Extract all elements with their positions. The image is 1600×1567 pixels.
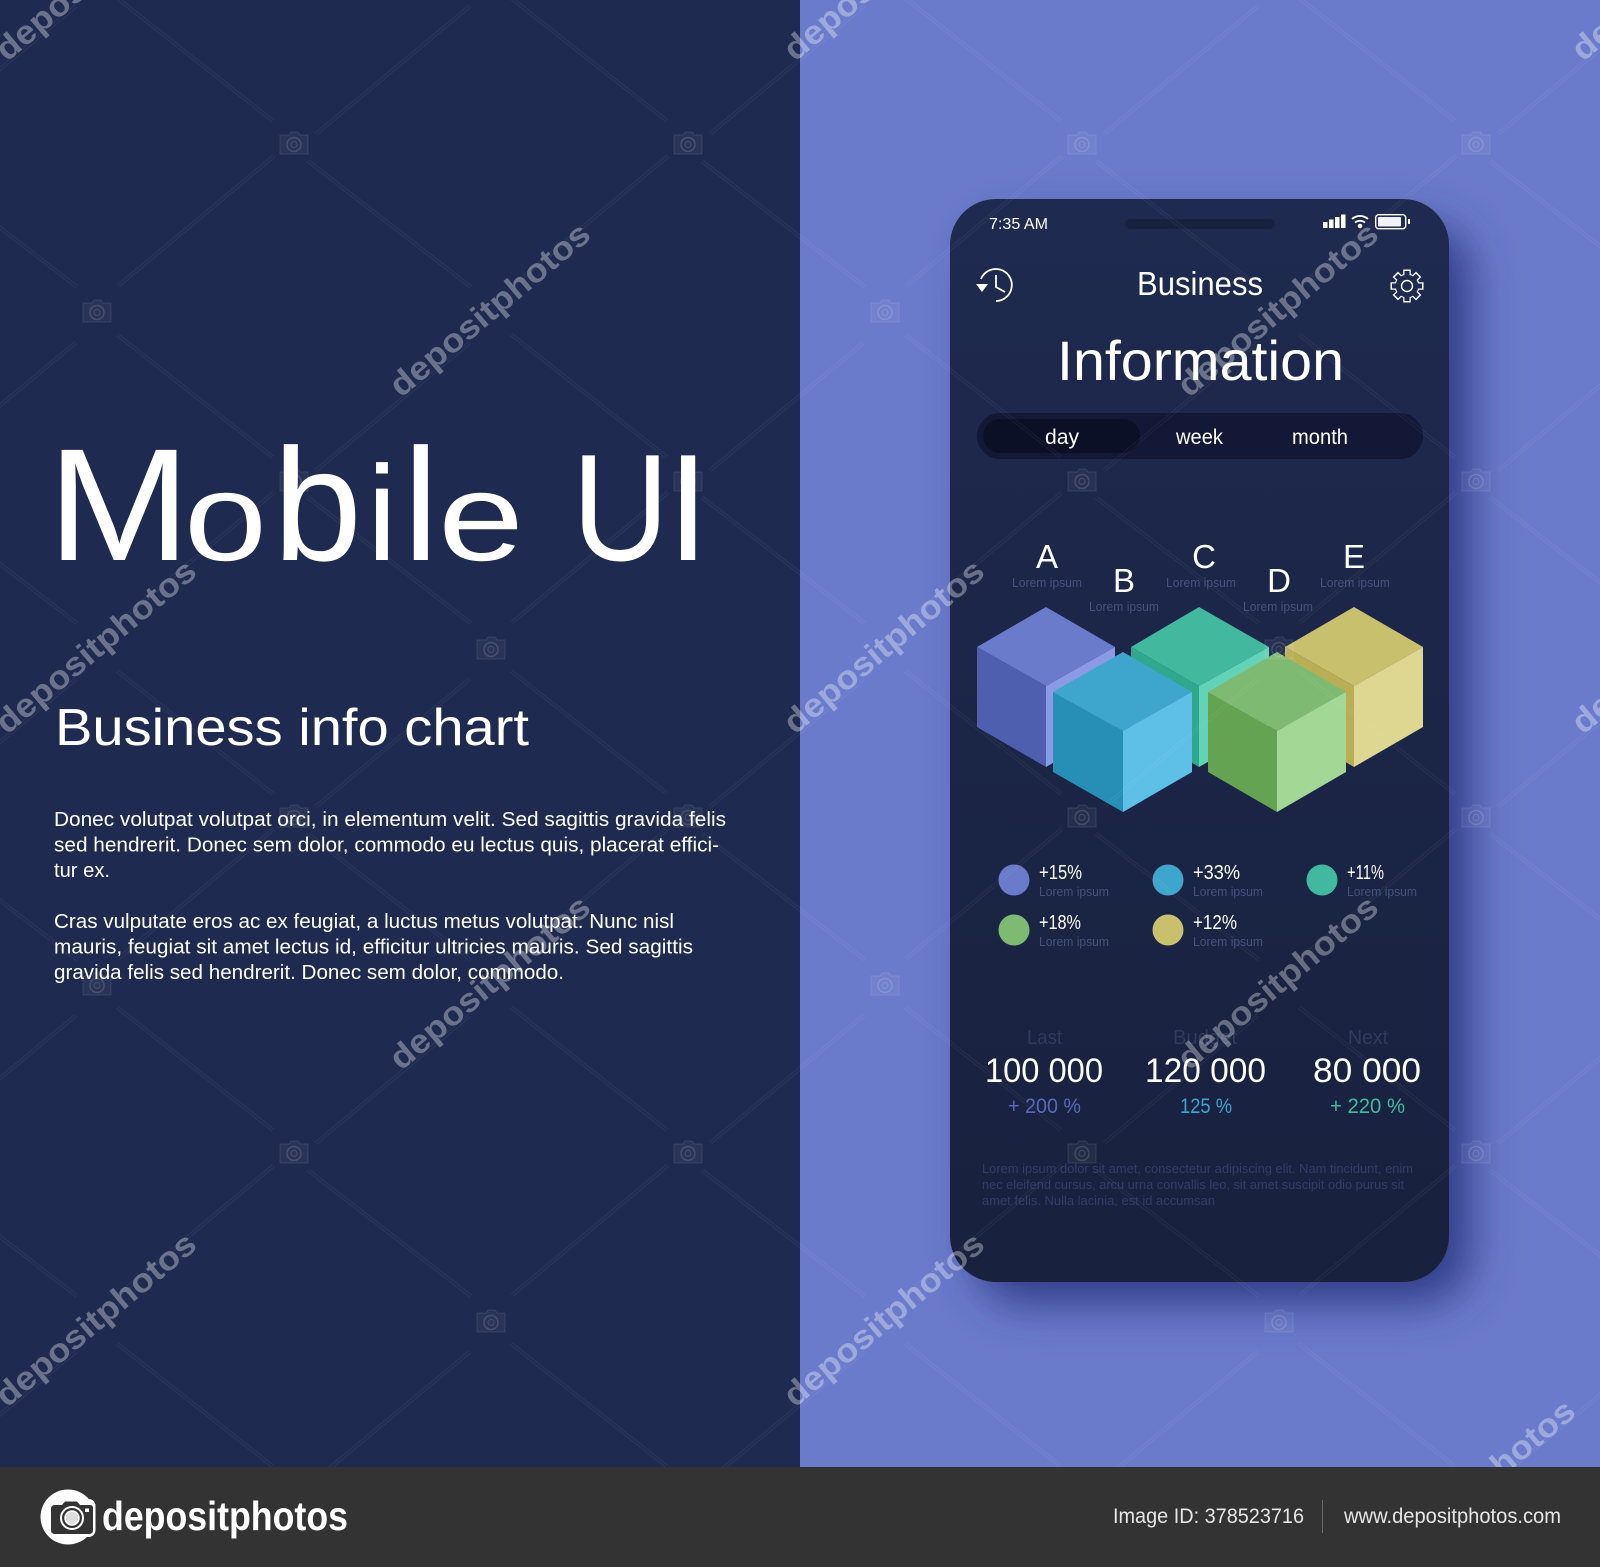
label B: Lorem ipsum bbox=[1089, 599, 1159, 614]
title: Mobile UI: o bbox=[184, 448, 267, 587]
footnote text: Lorem ipsum dolor sit amet, consectetur adipiscing elit. Nam tincidunt, enim bbox=[982, 1161, 1413, 1176]
legend item +11%: +11% bbox=[1347, 862, 1384, 884]
legend item +12%: +12% bbox=[1193, 912, 1237, 934]
watermark camera icons bbox=[83, 132, 1490, 1332]
website url: www.depositphotos.com bbox=[1343, 1505, 1561, 1528]
label A bbox=[1012, 538, 1082, 590]
stat: Last: Last bbox=[1027, 1027, 1062, 1049]
icon: wifi bbox=[1352, 216, 1368, 227]
label A: A bbox=[1036, 538, 1058, 575]
legend item +12%: Lorem ipsum bbox=[1193, 934, 1263, 949]
stat: Budget: 125 % bbox=[1180, 1095, 1232, 1118]
text block: paragraph 1: sed hendrerit. Donec sem dolor, commodo eu lectus quis, placerat effici- bbox=[54, 834, 719, 856]
label B bbox=[1089, 562, 1159, 614]
text block: paragraph 2 bbox=[54, 911, 693, 984]
cube C bbox=[1131, 607, 1269, 767]
stat: Next bbox=[1313, 1027, 1421, 1118]
label B: B bbox=[1113, 562, 1135, 599]
speaker notch bbox=[1125, 219, 1275, 229]
stat: Budget: Budget bbox=[1173, 1027, 1237, 1049]
stat: Next: Next bbox=[1348, 1027, 1388, 1049]
watermark text: depositphotos bbox=[1170, 888, 1385, 1077]
legend item +12% bbox=[1152, 912, 1263, 949]
legend item +11%: Lorem ipsum bbox=[1347, 884, 1417, 899]
screen heading: Business: Business bbox=[1137, 265, 1263, 302]
legend item +18% bbox=[998, 912, 1109, 949]
title: Mobile UI: M bbox=[48, 415, 190, 594]
footer divider bbox=[1322, 1500, 1323, 1533]
label E: Lorem ipsum bbox=[1320, 575, 1390, 590]
phone mockup bbox=[950, 199, 1470, 1303]
stat: Next: + 220 % bbox=[1330, 1095, 1405, 1118]
legend item +15%: +15% bbox=[1039, 862, 1082, 884]
label D bbox=[1243, 562, 1313, 614]
legend item +33%: +33% bbox=[1193, 862, 1240, 884]
icon: battery bbox=[1376, 215, 1410, 229]
text block: paragraph 1 bbox=[54, 809, 726, 882]
stat: Last: 100 000 bbox=[985, 1052, 1103, 1090]
legend item +33% bbox=[1152, 862, 1263, 899]
phone shadow bbox=[975, 225, 1470, 1303]
text block: paragraph 2: Cras vulputate eros ac ex feugiat, a luctus metus volutpat. Nunc nisl bbox=[54, 911, 674, 933]
cube D bbox=[1208, 652, 1346, 812]
footnote text: nec eleifend cursus, arcu urna convallis leo, sit amet suscipit odio purus sit bbox=[982, 1177, 1404, 1192]
watermark text: depositphotos bbox=[1170, 215, 1385, 404]
legend bbox=[998, 862, 1417, 949]
panel: left dark background bbox=[0, 0, 800, 1467]
text block: paragraph 1: Donec volutpat volutpat orci, in elementum velit. Sed sagittis gravida felis bbox=[54, 809, 726, 831]
phone body bbox=[950, 199, 1449, 1282]
stat: Budget bbox=[1145, 1027, 1266, 1118]
title: Mobile UI: e bbox=[438, 448, 524, 587]
cube A bbox=[977, 607, 1115, 767]
footnote text bbox=[982, 1161, 1413, 1208]
watermark text: depositphotos bbox=[382, 888, 597, 1077]
cube labels bbox=[1012, 538, 1390, 614]
label E bbox=[1320, 538, 1390, 590]
stat: Next: 80 000 bbox=[1313, 1052, 1421, 1090]
screen heading: Information: Information bbox=[1057, 329, 1344, 392]
label C: C bbox=[1192, 538, 1216, 575]
legend item +15% bbox=[998, 862, 1109, 899]
image id: Image ID: 378523716 bbox=[1113, 1505, 1304, 1528]
legend item +33%: Lorem ipsum bbox=[1193, 884, 1263, 899]
title: Mobile UI: U bbox=[572, 423, 669, 593]
footer bar bbox=[0, 1467, 1600, 1567]
text block: paragraph 1: tur ex. bbox=[54, 860, 110, 882]
watermark text: depositphotos bbox=[382, 215, 597, 404]
tab: month: month bbox=[1292, 426, 1348, 449]
tab selector bbox=[977, 413, 1423, 459]
title: Mobile UI: i bbox=[367, 438, 397, 589]
watermark text: depositphotos bbox=[776, 552, 991, 741]
label D: Lorem ipsum bbox=[1243, 599, 1313, 614]
title: Mobile UI: l bbox=[403, 415, 439, 594]
icon: signal bars bbox=[1323, 214, 1346, 228]
icon: settings gear bbox=[1390, 270, 1424, 302]
label C bbox=[1166, 538, 1236, 590]
label C: Lorem ipsum bbox=[1166, 575, 1236, 590]
cube E bbox=[1285, 607, 1423, 767]
title: Mobile UI: b bbox=[273, 415, 362, 594]
panel: right periwinkle background bbox=[800, 0, 1600, 1467]
stat: Last bbox=[985, 1027, 1103, 1118]
cube B bbox=[1053, 652, 1192, 812]
legend item +11% bbox=[1306, 862, 1417, 899]
status time: 7:35 AM bbox=[989, 216, 1048, 233]
label D: D bbox=[1267, 562, 1291, 599]
isometric cube chart bbox=[977, 607, 1423, 812]
legend item +18%: Lorem ipsum bbox=[1039, 934, 1109, 949]
left text column bbox=[48, 415, 726, 984]
legend item +18%: +18% bbox=[1039, 912, 1081, 934]
title: Mobile UI: I bbox=[667, 423, 709, 593]
selected tab: day bbox=[983, 419, 1140, 453]
icon: logo camera bbox=[40, 1490, 96, 1544]
text block: paragraph 2: gravida felis sed hendrerit. Donec sem dolor, commodo. bbox=[54, 962, 564, 984]
legend item +15%: Lorem ipsum bbox=[1039, 884, 1109, 899]
watermark text: depositphotos bbox=[776, 1225, 991, 1414]
text block: paragraph 2: mauris, feugiat sit amet lectus id, efficitur ultricies mauris. Sed sagittis bbox=[54, 936, 693, 958]
logo wordmark: depositphotos bbox=[102, 1493, 348, 1539]
stats row bbox=[985, 1027, 1421, 1118]
stat: Last: + 200 % bbox=[1008, 1095, 1081, 1118]
tab selector: day bbox=[1045, 426, 1080, 449]
subtitle: Business info chart bbox=[55, 699, 530, 757]
stat: Budget: 120 000 bbox=[1145, 1052, 1266, 1090]
label A: Lorem ipsum bbox=[1012, 575, 1082, 590]
footnote text: amet felis. Nulla lacinia, est id accumsan bbox=[982, 1193, 1215, 1208]
tab: week: week bbox=[1175, 426, 1223, 449]
icon: history clock bbox=[976, 269, 1012, 301]
label E: E bbox=[1343, 538, 1365, 575]
